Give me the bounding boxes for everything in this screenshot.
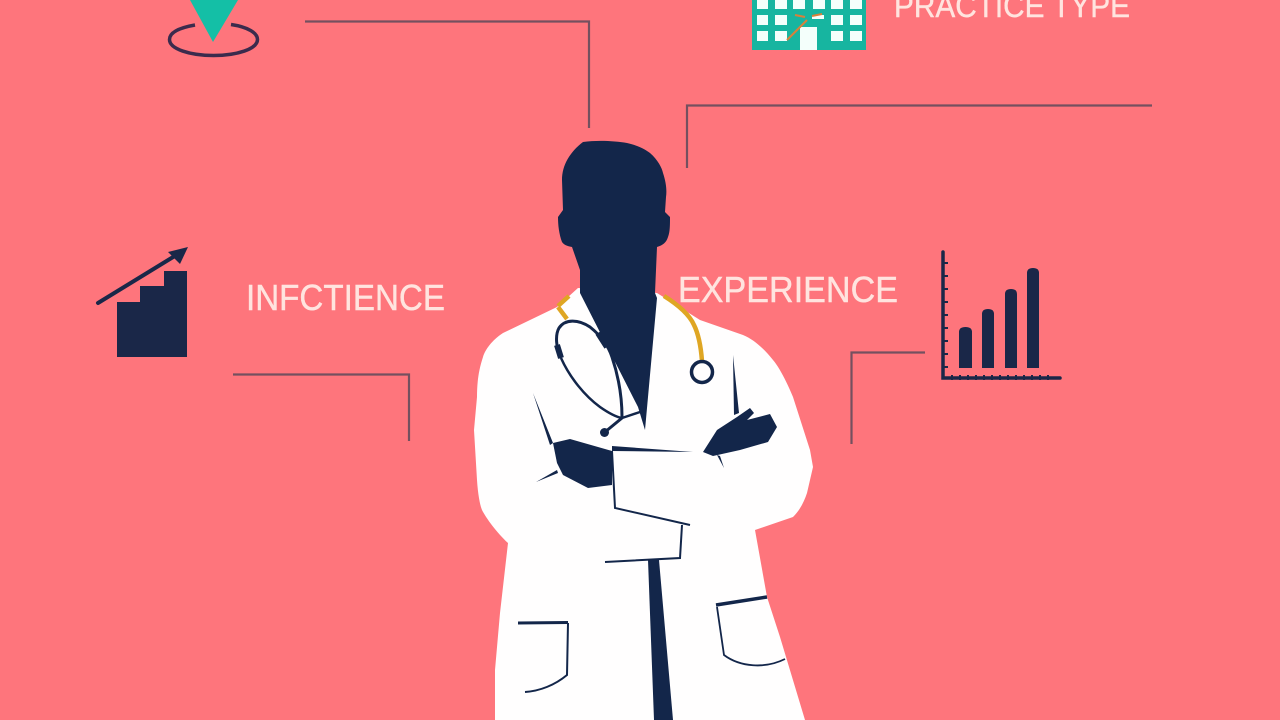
label: infctience: INFCTIENCE xyxy=(246,277,445,318)
connector: middle left xyxy=(233,374,409,441)
left pocket xyxy=(518,622,568,692)
crossed arms: right hand xyxy=(703,408,777,456)
white coat xyxy=(474,288,813,720)
coat fold lines xyxy=(533,355,739,482)
connector: middle right xyxy=(852,352,925,444)
icon: rising stairs with arrow xyxy=(98,247,188,357)
connector: top right xyxy=(687,106,1152,168)
icon: hospital building xyxy=(752,0,866,50)
connector: top left xyxy=(305,22,589,128)
cuff outline xyxy=(605,451,690,562)
stethoscope xyxy=(557,296,712,437)
icon: location pin xyxy=(170,0,258,56)
coat opening xyxy=(648,560,673,720)
head and neck silhouette xyxy=(558,141,670,430)
doctor figure xyxy=(474,141,813,720)
icon: bar chart xyxy=(943,252,1060,380)
label: experience: EXPERIENCE xyxy=(678,269,898,310)
right pocket xyxy=(716,597,785,665)
crossed arms: left hand xyxy=(553,439,612,488)
